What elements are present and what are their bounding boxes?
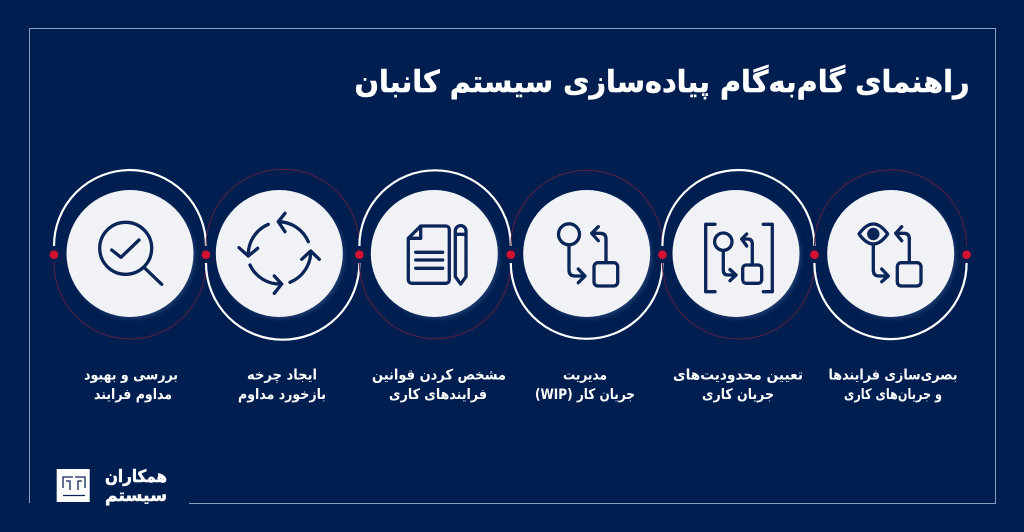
label: step 6: بصری‌سازی فرایندها (828, 368, 958, 384)
label: step 3: مشخص کردن قوانین (372, 368, 506, 384)
label: step 2: بازخورد مداوم (238, 387, 326, 403)
logo wordmark: سیستم (105, 486, 167, 506)
label: step 4 (535, 368, 635, 403)
icon: bracketed flow (706, 224, 772, 292)
label: step 3 (372, 368, 506, 403)
logo (57, 467, 167, 506)
logo mark (57, 469, 90, 502)
icon: flow (558, 224, 618, 286)
label: step 3: فرایندهای کاری (389, 387, 487, 403)
title: راهنمای گام‌به‌گام پیاده‌سازی سیستم کانبان (354, 64, 970, 100)
label: step 6 (828, 368, 958, 403)
label: step 5: تعیین محدودیت‌های (673, 368, 803, 384)
step 5: limits (662, 170, 814, 339)
label: step 4: مدیریت (563, 368, 607, 384)
step 6: visualisation (814, 170, 967, 339)
label: step 1: بررسی و بهبود (84, 368, 178, 384)
step 4: WIP (511, 170, 662, 339)
icon: magnifier with check (100, 222, 162, 284)
step 2: feedback loop (206, 169, 359, 340)
label: step 6: و جریان‌های کاری (844, 387, 942, 403)
icon: eye flow (859, 224, 921, 286)
logo wordmark: همکاران (105, 467, 167, 487)
icon: cycle arrows (239, 213, 319, 293)
step 1: continuous review (54, 170, 206, 339)
label: step 4: جریان کار (WIP) (535, 387, 635, 403)
label: step 1: مداوم فرایند (94, 387, 172, 403)
label: step 2: ایجاد چرخه (247, 368, 317, 384)
connector dots (50, 250, 971, 259)
step 3: rules (359, 170, 511, 339)
icon: document and pencil (408, 226, 466, 284)
label: step 5: جریان کاری (702, 387, 774, 403)
label: step 1 (84, 368, 178, 403)
logo wordmark (105, 467, 167, 506)
label: step 5 (673, 368, 803, 403)
label: step 2 (238, 368, 326, 403)
